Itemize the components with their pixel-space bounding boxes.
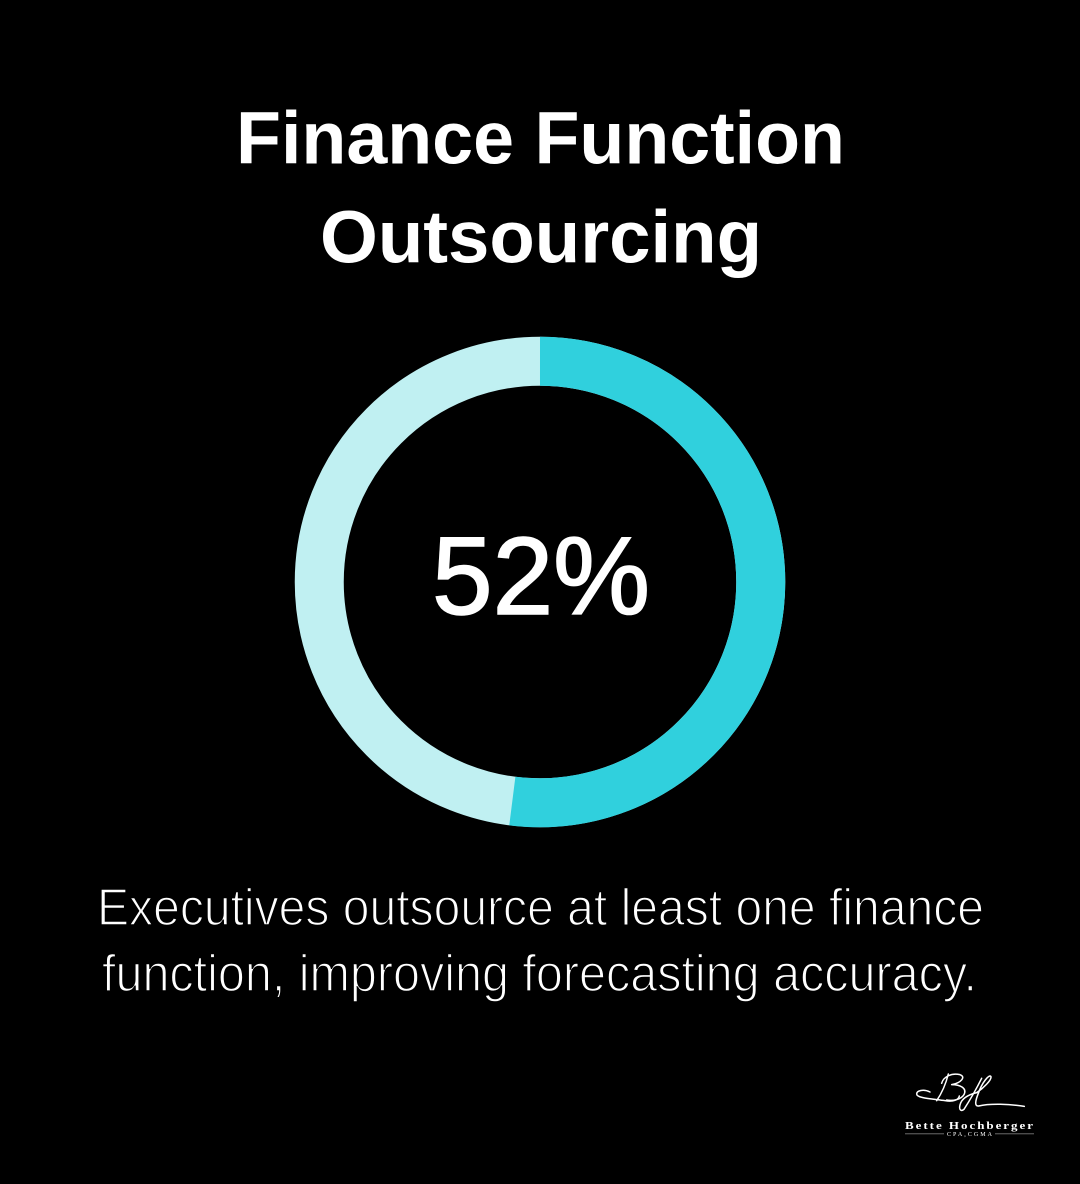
logo credentials: CPA,CGMA <box>947 1132 993 1138</box>
caption text: function, improving forecasting accuracy. <box>102 945 977 1003</box>
caption text: Executives outsource at least one finance <box>97 879 984 937</box>
donut value arc: 52% <box>512 361 761 803</box>
title <box>236 96 845 278</box>
title: Finance Function <box>236 96 845 180</box>
center percentage: 52% <box>432 515 650 638</box>
donut chart: 52% <box>319 361 761 803</box>
title: Outsourcing <box>320 196 762 278</box>
logo: Bette Hochberger signature <box>905 1074 1035 1138</box>
caption text <box>97 879 984 1003</box>
icon: BH signature mark <box>917 1074 1024 1110</box>
logo name: Bette Hochberger <box>905 1121 1035 1132</box>
donut track: remaining 48% <box>319 361 761 803</box>
